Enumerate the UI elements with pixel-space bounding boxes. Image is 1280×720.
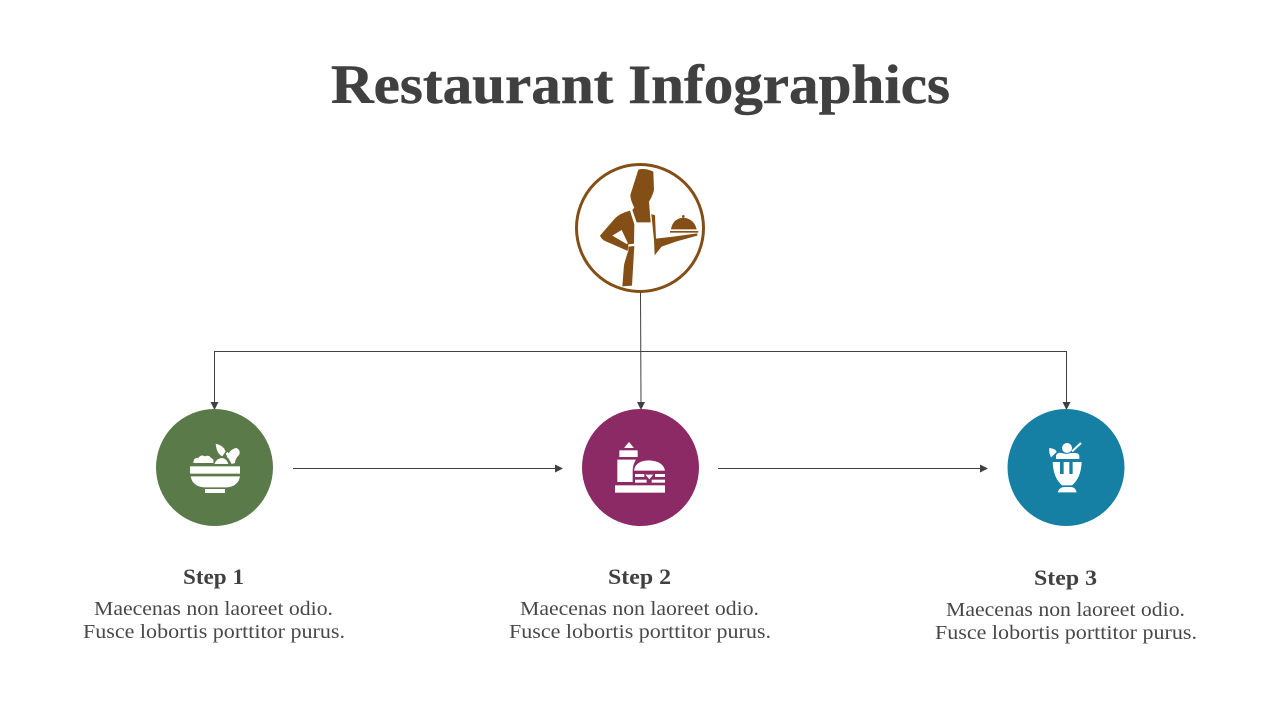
icon: ice cream sundae [1008,409,1124,526]
text block: step 2 [509,564,771,643]
title: Restaurant Infographics [331,54,950,115]
text block: step 2: Step 2 [608,564,671,589]
text block: step 3 [935,565,1197,644]
arrow: step 2 to step 3 [718,464,988,472]
text block: step 3: Step 3 [1034,565,1097,590]
text block: step 1 [83,564,345,643]
icon: burger and bottle [582,409,699,526]
arrow: step 1 to step 2 [293,464,563,472]
icon: chef holding cloche [576,164,704,292]
text block: step 1: Fusce lobortis porttitor purus. [83,621,345,643]
text block: step 1: Maecenas non laoreet odio. [94,598,333,620]
connector: branch to step 1 and step 3 [210,352,1070,410]
text block: step 1: Step 1 [183,564,244,589]
text block: step 2: Fusce lobortis porttitor purus. [509,621,771,643]
text block: step 2: Maecenas non laoreet odio. [520,598,759,620]
text block: step 3: Fusce lobortis porttitor purus. [935,622,1197,644]
connector: from chef to step 2 [640,292,642,403]
text block: step 3: Maecenas non laoreet odio. [946,599,1185,621]
icon: salad bowl [156,409,273,526]
